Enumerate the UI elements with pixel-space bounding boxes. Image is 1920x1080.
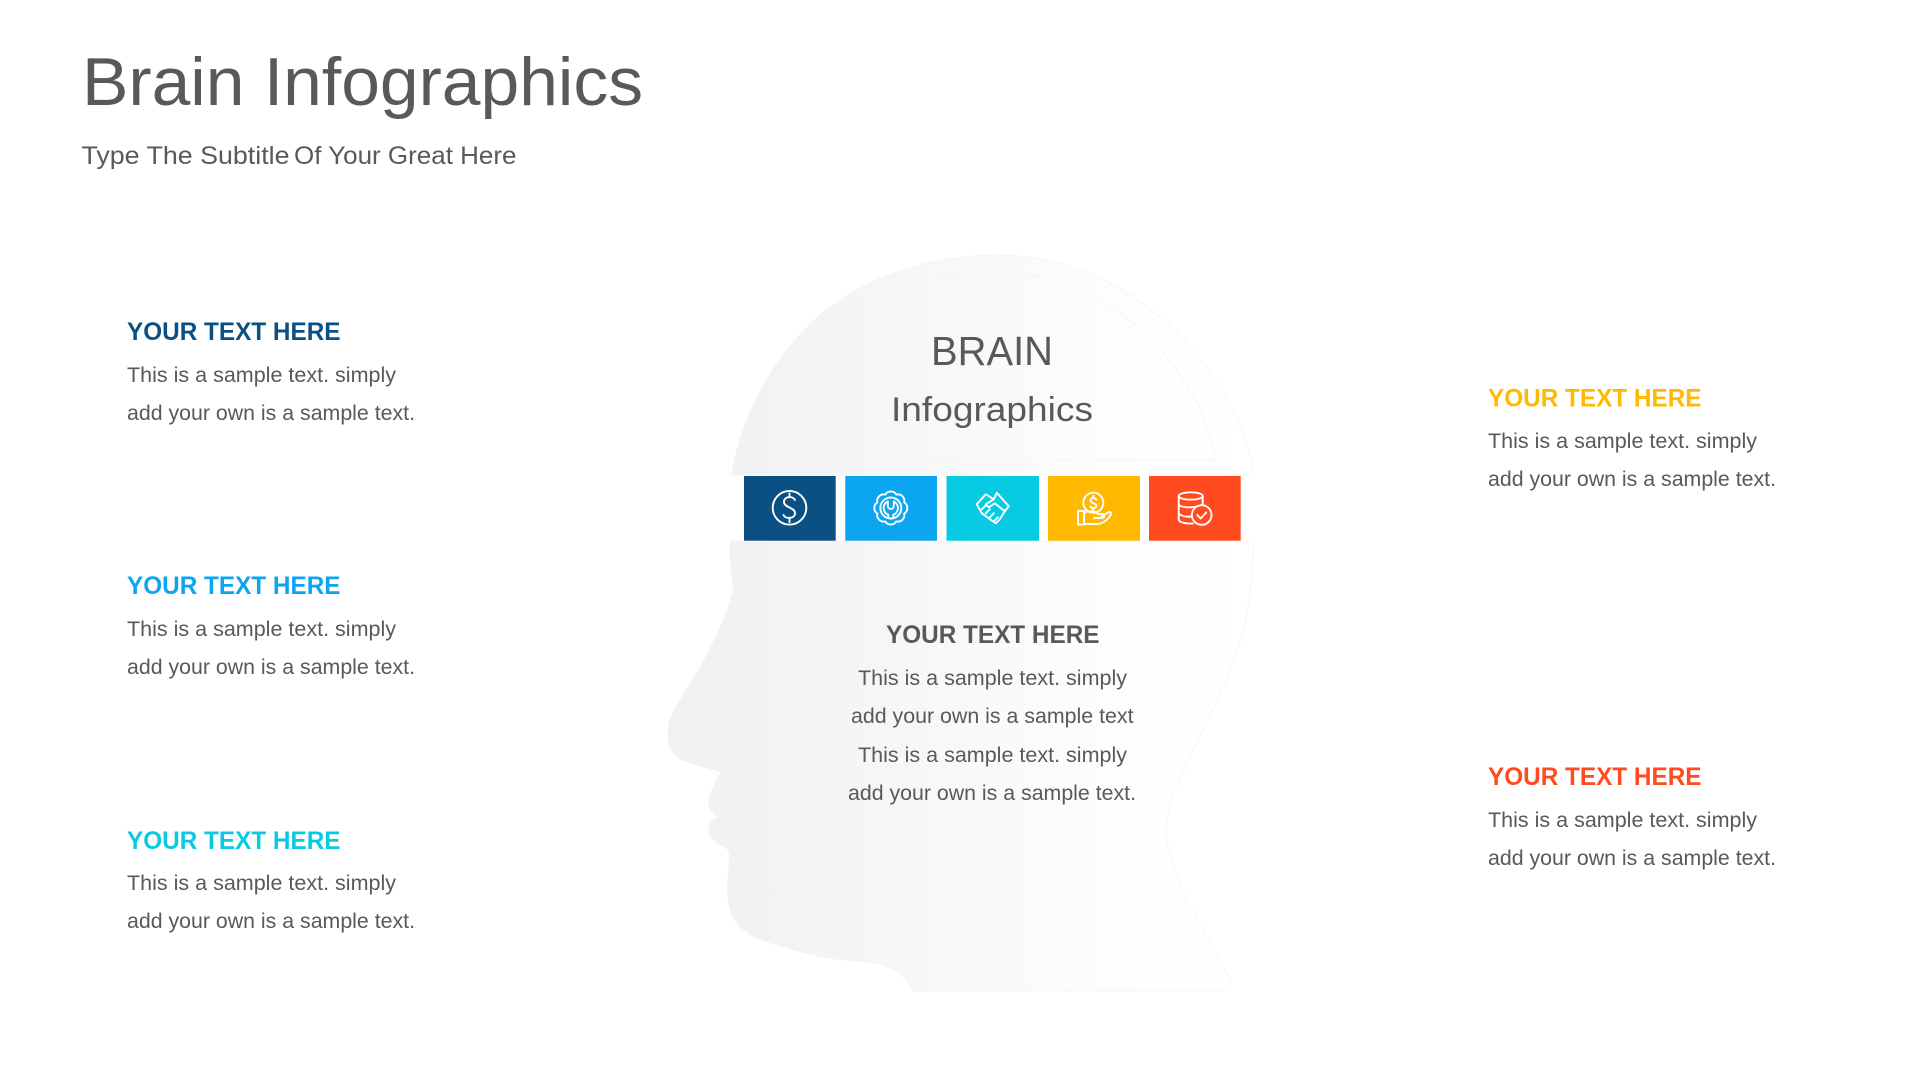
subtitle: Type The Subtitle <box>82 142 290 170</box>
icon tile: handshake <box>946 476 1039 541</box>
body line 2: add your own is a sample text. <box>127 910 415 933</box>
center text block <box>848 621 1136 805</box>
subtitle: Of Your Great Here <box>294 142 516 170</box>
body line 2: add your own is a sample text. <box>1488 468 1776 491</box>
icon tile: hand holding coin <box>1048 476 1140 541</box>
body line 1: This is a sample text. simply <box>1488 430 1758 453</box>
heading: YOUR TEXT HERE <box>1488 763 1702 791</box>
body line 1: This is a sample text. simply <box>127 618 397 641</box>
icon tile: dollar coin <box>744 476 836 541</box>
center body line 1: This is a sample text. simply <box>858 667 1128 690</box>
body line 1: This is a sample text. simply <box>127 364 397 387</box>
body line 1: This is a sample text. simply <box>1488 809 1758 832</box>
center body line 3: This is a sample text. simply <box>858 744 1128 767</box>
head silhouette <box>668 255 1253 991</box>
center body line 4: add your own is a sample text. <box>848 782 1136 805</box>
heading: YOUR TEXT HERE <box>1488 384 1702 412</box>
title: Brain Infographics <box>82 44 643 120</box>
head dome <box>732 255 1253 475</box>
body line 1: This is a sample text. simply <box>127 872 397 895</box>
body line 2: add your own is a sample text. <box>127 656 415 679</box>
left block 2 <box>127 572 415 679</box>
center heading: BRAIN: BRAIN <box>931 328 1053 374</box>
left block 3 <box>127 827 415 933</box>
subtitle <box>82 142 516 170</box>
heading: YOUR TEXT HERE <box>127 827 340 855</box>
head lower face and neck <box>668 541 1253 991</box>
body line 2: add your own is a sample text. <box>127 402 415 425</box>
left block 1 <box>127 318 415 425</box>
center body line 2: add your own is a sample text <box>851 705 1134 728</box>
right block 2 <box>1488 763 1776 870</box>
icon tile: gear with wrench <box>845 476 937 541</box>
center heading: YOUR TEXT HERE <box>886 621 1100 649</box>
right block 1 <box>1488 384 1776 491</box>
heading: YOUR TEXT HERE <box>127 318 340 346</box>
heading: YOUR TEXT HERE <box>127 572 340 600</box>
inner dome outline <box>769 272 1216 460</box>
body line 2: add your own is a sample text. <box>1488 847 1776 870</box>
center subheading: Infographics: Infographics <box>891 391 1093 429</box>
icon tile: database with check <box>1149 476 1241 541</box>
